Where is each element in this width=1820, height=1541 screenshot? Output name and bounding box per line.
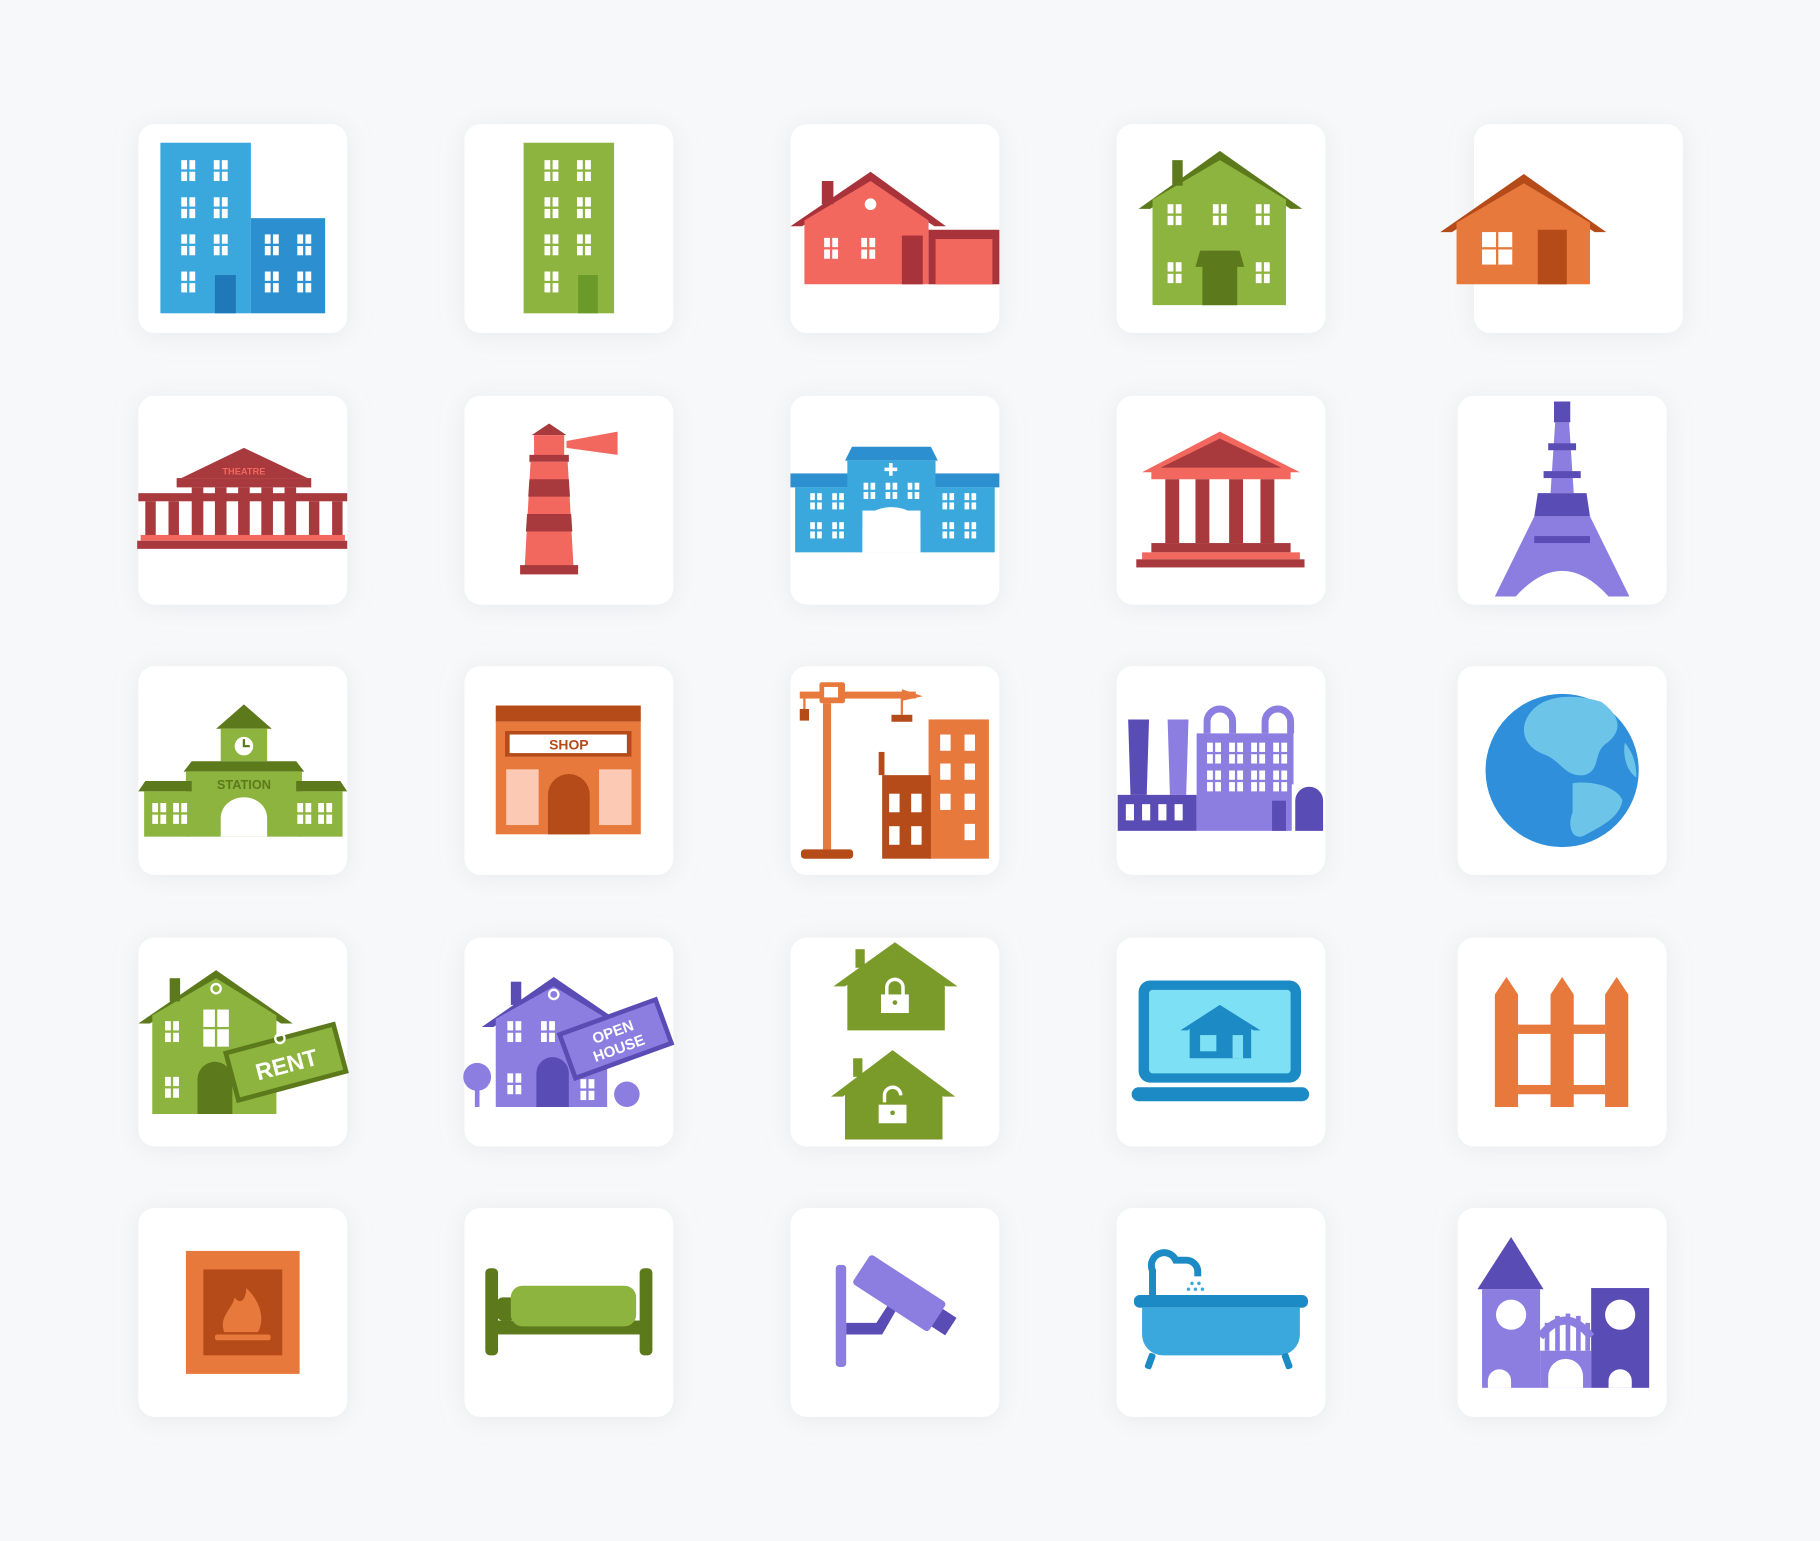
icon: castle [1477,1237,1649,1388]
icon: open house: OPEN [590,1017,636,1048]
icon: red house with garage [790,172,999,284]
icon: fence [1495,977,1628,1107]
icon: globe [1486,694,1639,847]
icon: station: STATION [217,777,271,792]
icon: bed [485,1268,652,1355]
icon: orange house [1440,174,1606,284]
cards [138,124,1683,1417]
icon: locked houses [831,942,958,1140]
icon: house for rent [138,970,349,1114]
icon: theatre [137,448,347,549]
icon: laptop home [1132,981,1309,1101]
icon: lighthouse [520,424,618,574]
icon: green house [1139,151,1302,305]
icon: open house: HOUSE [591,1032,647,1066]
icon: tower building [524,143,614,313]
icon: theatre: THEATRE [222,467,265,477]
icon: open house [463,977,674,1107]
icon: office buildings [160,143,325,313]
icon: eiffel tower [1495,401,1629,596]
icon: hospital [790,447,999,552]
icon: bank [1136,432,1305,567]
icon: house for rent: RENT [253,1044,320,1085]
icon: shop: SHOP [549,737,589,753]
icon: bathtub [1134,1253,1308,1370]
icon: security camera [836,1254,960,1367]
icon: shop [496,706,641,834]
icon: factory [1118,709,1323,831]
icon: crane construction [800,682,989,859]
icon: station [138,704,347,837]
icon: fireplace [186,1251,300,1374]
